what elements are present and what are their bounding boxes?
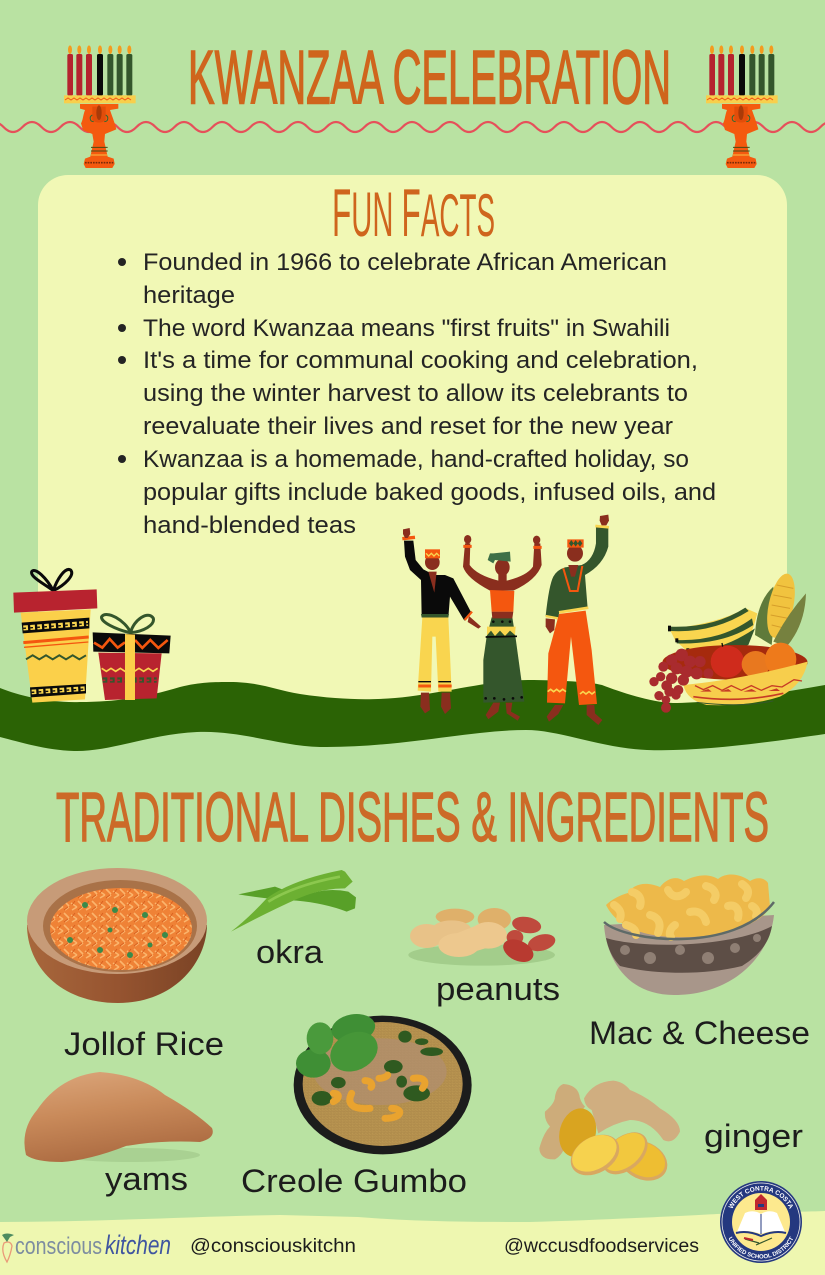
ingredient: yam	[24, 1072, 213, 1162]
label: creole gumbo: Creole Gumbo	[241, 1163, 467, 1199]
icon: kinara right	[706, 45, 778, 168]
label: ginger: ginger	[704, 1118, 803, 1154]
ingredient: peanuts	[408, 908, 557, 966]
text block: fun facts list: reevaluate their lives and reset for the new year	[143, 413, 673, 440]
decorative wavy line	[0, 122, 825, 132]
label: okra: okra	[256, 934, 323, 970]
dish: jollof rice bowl	[27, 868, 207, 1003]
text block: fun facts list	[118, 249, 716, 539]
text block: fun facts list: The word Kwanzaa means "first fruits" in Swahili	[143, 315, 670, 342]
text block: fun facts list: using the winter harvest to allow its celebrants to	[143, 380, 688, 407]
logo: school district seal: WEST CONTRA COSTA	[728, 1186, 793, 1209]
figure: man in black top	[402, 528, 481, 714]
dish: mac and cheese bowl	[604, 875, 774, 995]
icon: tall gift	[13, 569, 97, 703]
text block: fun facts list: It's a time for communal cooking and celebration,	[143, 347, 698, 374]
text block: fun facts list: hand-blended teas	[143, 512, 356, 539]
icon: fruit bowl with bananas, corn and grapes	[649, 571, 808, 713]
footer band	[0, 1211, 825, 1275]
text block: fun facts list: Kwanzaa is a homemade, hand-crafted holiday, so	[143, 446, 689, 473]
text block: fun facts list: popular gifts include baked goods, infused oils, and	[143, 479, 716, 506]
heading: fun facts: FUN FACTS	[332, 175, 495, 251]
ingredient: ginger	[539, 1081, 680, 1188]
logo: school district seal: UNIFIED SCHOOL DISTRICT	[728, 1236, 793, 1258]
logo: conscious kitchen	[2, 1230, 171, 1262]
logo: school district seal	[720, 1181, 802, 1263]
icon: kinara left	[64, 45, 136, 168]
logo: conscious kitchen: kitchen	[105, 1230, 171, 1260]
ground hill	[0, 680, 825, 751]
text block: fun facts list: Founded in 1966 to celebrate African American	[143, 249, 667, 276]
text block: fun facts list: heritage	[143, 282, 235, 309]
label: jollof rice: Jollof Rice	[64, 1026, 224, 1062]
label: yams: yams	[105, 1161, 188, 1197]
figure: woman in green skirt	[463, 535, 542, 721]
label: conscious kitchen handle: @consciouskitchn	[190, 1236, 356, 1257]
label: mac and cheese: Mac & Cheese	[589, 1015, 810, 1051]
panel: fun facts	[38, 175, 787, 720]
logo: conscious kitchen: conscious	[15, 1233, 102, 1260]
ingredient: okra	[231, 870, 356, 932]
dish: creole gumbo	[294, 1011, 472, 1154]
label: peanuts: peanuts	[436, 971, 560, 1007]
label: food services handle: @wccusdfoodservices	[504, 1236, 699, 1257]
icon: small gift	[93, 615, 171, 700]
figure: man in orange trousers	[546, 515, 609, 725]
